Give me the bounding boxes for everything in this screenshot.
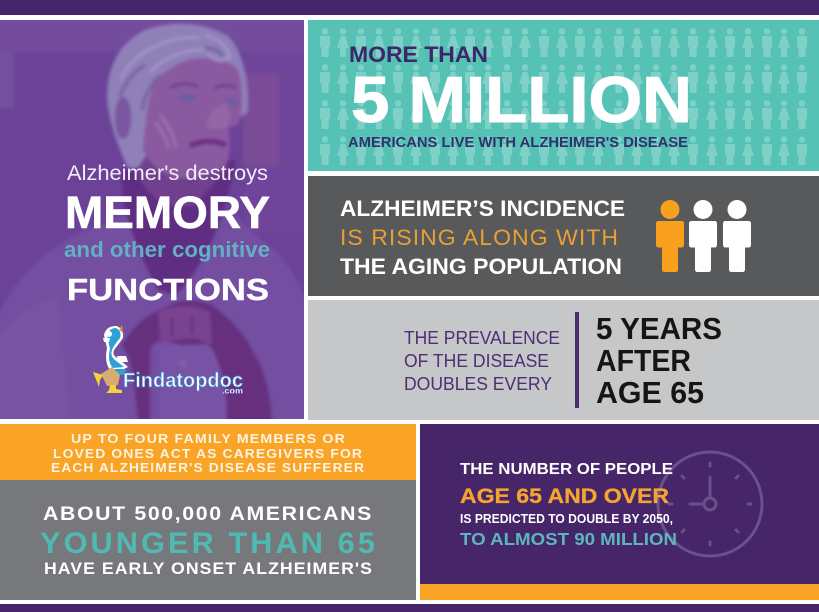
text: incidence line 2: IS RISING ALONG WITH <box>340 225 619 250</box>
headline FUNCTIONS: FUNCTIONS <box>67 272 269 307</box>
divider <box>575 312 579 408</box>
text: prevalence: DOUBLES EVERY <box>404 374 552 394</box>
text: caregivers <box>51 432 365 475</box>
headline and other cognitive: and other cognitive <box>64 237 270 262</box>
headline MEMORY: MEMORY <box>65 187 270 238</box>
text: caregivers: LOVED ONES ACT AS CAREGIVERS FOR <box>53 447 363 461</box>
orange strip <box>420 584 819 600</box>
hands and cane <box>122 301 272 430</box>
text: caregivers: UP TO FOUR FAMILY MEMBERS OR <box>71 432 346 446</box>
text: almost 90 million: TO ALMOST 90 MILLION <box>460 529 677 549</box>
text: early onset: HAVE EARLY ONSET ALZHEIMER'S <box>44 559 373 578</box>
icon: clock <box>658 452 762 556</box>
big number: 5 million: 5 MILLION <box>351 63 692 136</box>
text: more than: MORE THAN <box>349 42 488 67</box>
neck and chest V <box>122 160 236 295</box>
icon: three people <box>656 200 751 272</box>
text: 5 years after age 65 <box>596 311 722 410</box>
bottom banner <box>0 604 819 612</box>
panel: incidence <box>308 176 819 296</box>
headline line 1: Alzheimer's destroys <box>67 162 268 185</box>
text: prevalence: THE PREVALENCE <box>404 328 560 348</box>
logo: Findatopdoc duck: .com <box>222 386 243 396</box>
top banner <box>0 0 819 15</box>
logo: Findatopdoc duck: Findatopdoc <box>123 370 243 392</box>
ear <box>115 97 131 139</box>
hair blob <box>107 24 248 168</box>
panel: early onset <box>0 480 416 600</box>
text: prevalence: OF THE DISEASE <box>404 351 549 371</box>
photo of elderly woman <box>0 10 314 430</box>
text: number of people: THE NUMBER OF PEOPLE <box>460 461 673 478</box>
text: predicted to double: IS PREDICTED TO DOUBLE BY 2050, <box>460 512 673 526</box>
text: age 65 and over: AGE 65 AND OVER <box>460 485 669 508</box>
logo: Findatopdoc duck <box>93 325 243 396</box>
face <box>143 58 242 178</box>
text: caregivers: EACH ALZHEIMER'S DISEASE SUFFERER <box>51 461 365 475</box>
text: 5 years after age 65: AGE 65 <box>596 375 704 410</box>
text: about 500,000: ABOUT 500,000 AMERICANS <box>43 503 373 525</box>
people pattern <box>320 28 807 165</box>
hair texture <box>120 35 230 80</box>
panel: photo with headline <box>0 10 314 430</box>
panel: age 65 and over <box>420 424 819 600</box>
text: prevalence <box>404 328 560 394</box>
text: incidence line 1: ALZHEIMER’S INCIDENCE <box>340 196 625 221</box>
text: incidence line 3: THE AGING POPULATION <box>340 254 622 279</box>
text: 5 years after age 65: 5 YEARS <box>596 311 722 346</box>
panel: 5 million <box>308 20 819 171</box>
text: americans live with: AMERICANS LIVE WITH ALZHEIMER'S DISEASE <box>348 135 688 151</box>
panel: prevalence <box>308 300 819 420</box>
text: 5 years after age 65: AFTER <box>596 343 691 378</box>
text: younger than 65: YOUNGER THAN 65 <box>40 527 378 560</box>
panel: caregivers <box>0 424 416 480</box>
shirt <box>0 215 314 430</box>
